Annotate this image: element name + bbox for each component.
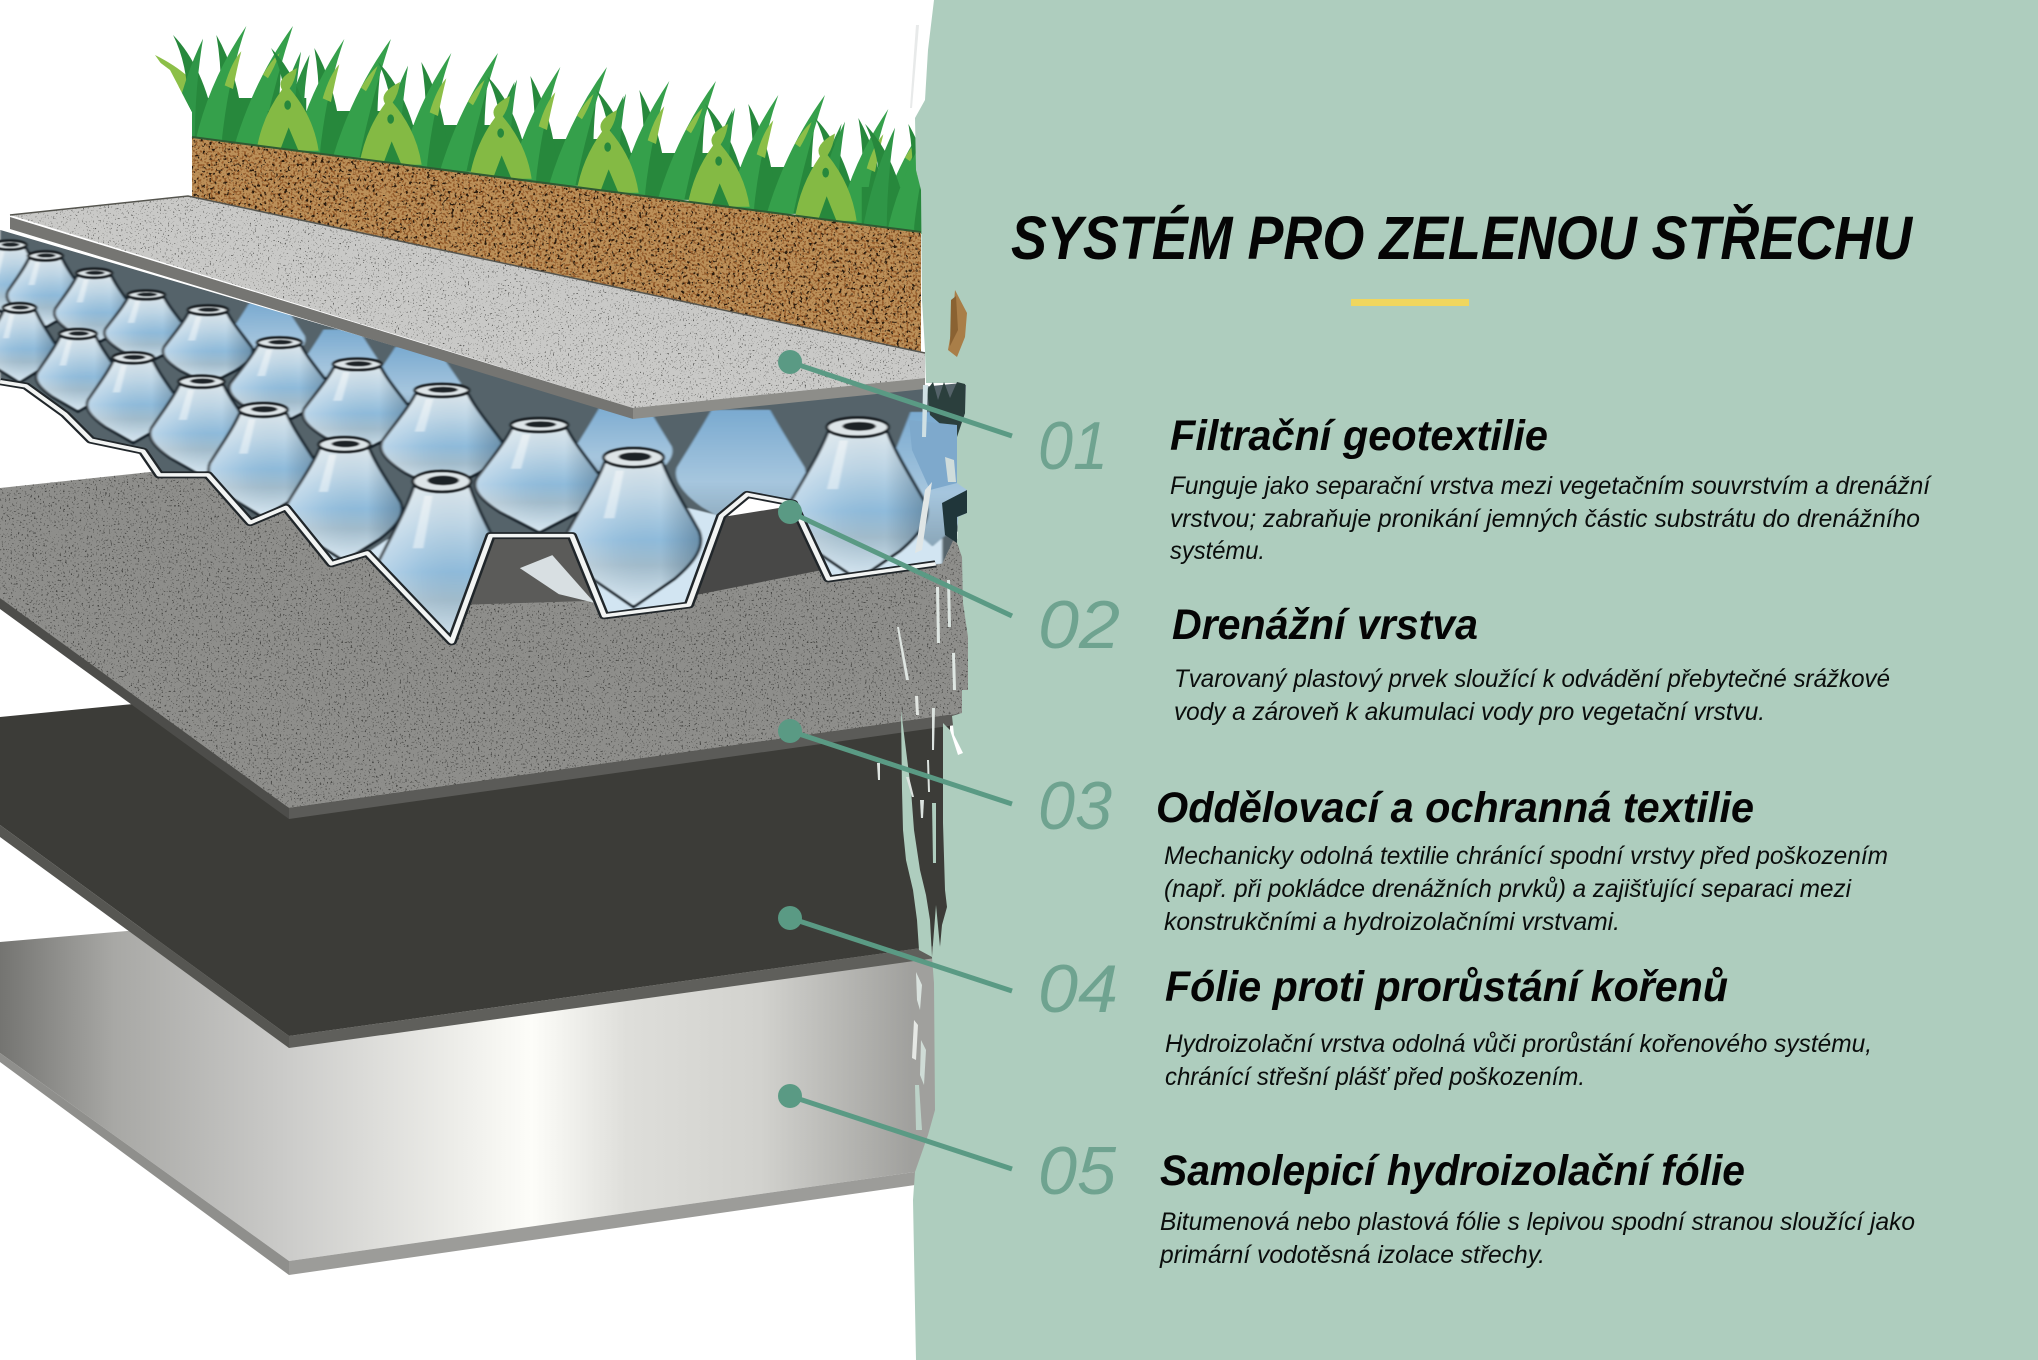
item 01: filter geotextile [1038,408,1932,565]
heading 03: Oddělovací a ochranná textilie [1156,784,1754,832]
description 03: Mechanicky odolná textilie chránící spodní vrstvy před poškozením [1164,842,1888,870]
illustration: green roof layer section [0,26,1002,1275]
layer: self-adhesive waterproofing foil [0,931,950,1275]
description 04: Hydroizolační vrstva odolná vůči prorůstání kořenového systému, [1165,1030,1872,1058]
item 02: drainage layer [1038,587,1890,726]
layer: drainage cups [0,226,981,651]
leader 03 [778,719,1012,804]
description 01: Funguje jako separační vrstva mezi vegetačním souvrstvím a drenážní [1170,472,1932,500]
heading 01: Filtrační geotextilie [1170,412,1548,460]
leader 04 [778,906,1012,991]
description 01 [1170,472,1932,565]
description 03: konstrukčními a hydroizolačními vrstvami. [1164,908,1620,936]
layer: separation and protective textile [0,472,970,819]
heading 04: Fólie proti prorůstání kořenů [1165,963,1728,1011]
description 04: chránící střešní plášť před poškozením. [1165,1063,1585,1091]
description 02: Tvarovaný plastový prvek sloužící k odvádění přebytečné srážkové [1174,665,1890,693]
item 05: self-adhesive waterproofing foil [1038,1133,1915,1269]
layer: root barrier foil [0,700,950,1048]
description 02: vody a zároveň k akumulaci vody pro vegetační vrstvu. [1174,698,1765,726]
number 02: 02 [1038,587,1120,663]
item 04: root barrier foil [1038,951,1872,1091]
description 03: (např. při pokládce drenážních prvků) a zajišťující separaci mezi [1164,875,1852,903]
title accent bar [1351,299,1469,306]
heading 05: Samolepicí hydroizolační fólie [1160,1147,1745,1195]
description 04 [1165,1030,1872,1091]
description 03 [1164,842,1888,936]
number 04: 04 [1038,951,1118,1027]
description 01: vrstvou; zabraňuje pronikání jemných částic substrátu do drenážního [1170,505,1920,533]
heading 02: Drenážní vrstva [1172,601,1478,649]
description 05: primární vodotěsná izolace střechy. [1159,1241,1545,1269]
title: SYSTÉM PRO ZELENOU STŘECHU [1011,204,1914,272]
description 05: Bitumenová nebo plastová fólie s lepivou spodní stranou sloužící jako [1160,1208,1915,1236]
number 05: 05 [1038,1133,1116,1209]
panel: green text background with brushed edge [913,0,2038,1360]
description 01: systému. [1170,537,1265,565]
description 05 [1159,1208,1915,1269]
brush streaks along the panel edge [877,25,967,1130]
number 03: 03 [1038,768,1112,844]
layer: filter geotextile [10,196,925,419]
description 02 [1174,665,1890,726]
leader 02 [778,500,1012,616]
grass [155,26,1002,234]
number 01: 01 [1038,408,1108,484]
leader 01 [778,350,1012,436]
item 03: separation textile [1038,768,1888,936]
layer: growing substrate [192,137,921,356]
leader 05 [778,1084,1012,1169]
